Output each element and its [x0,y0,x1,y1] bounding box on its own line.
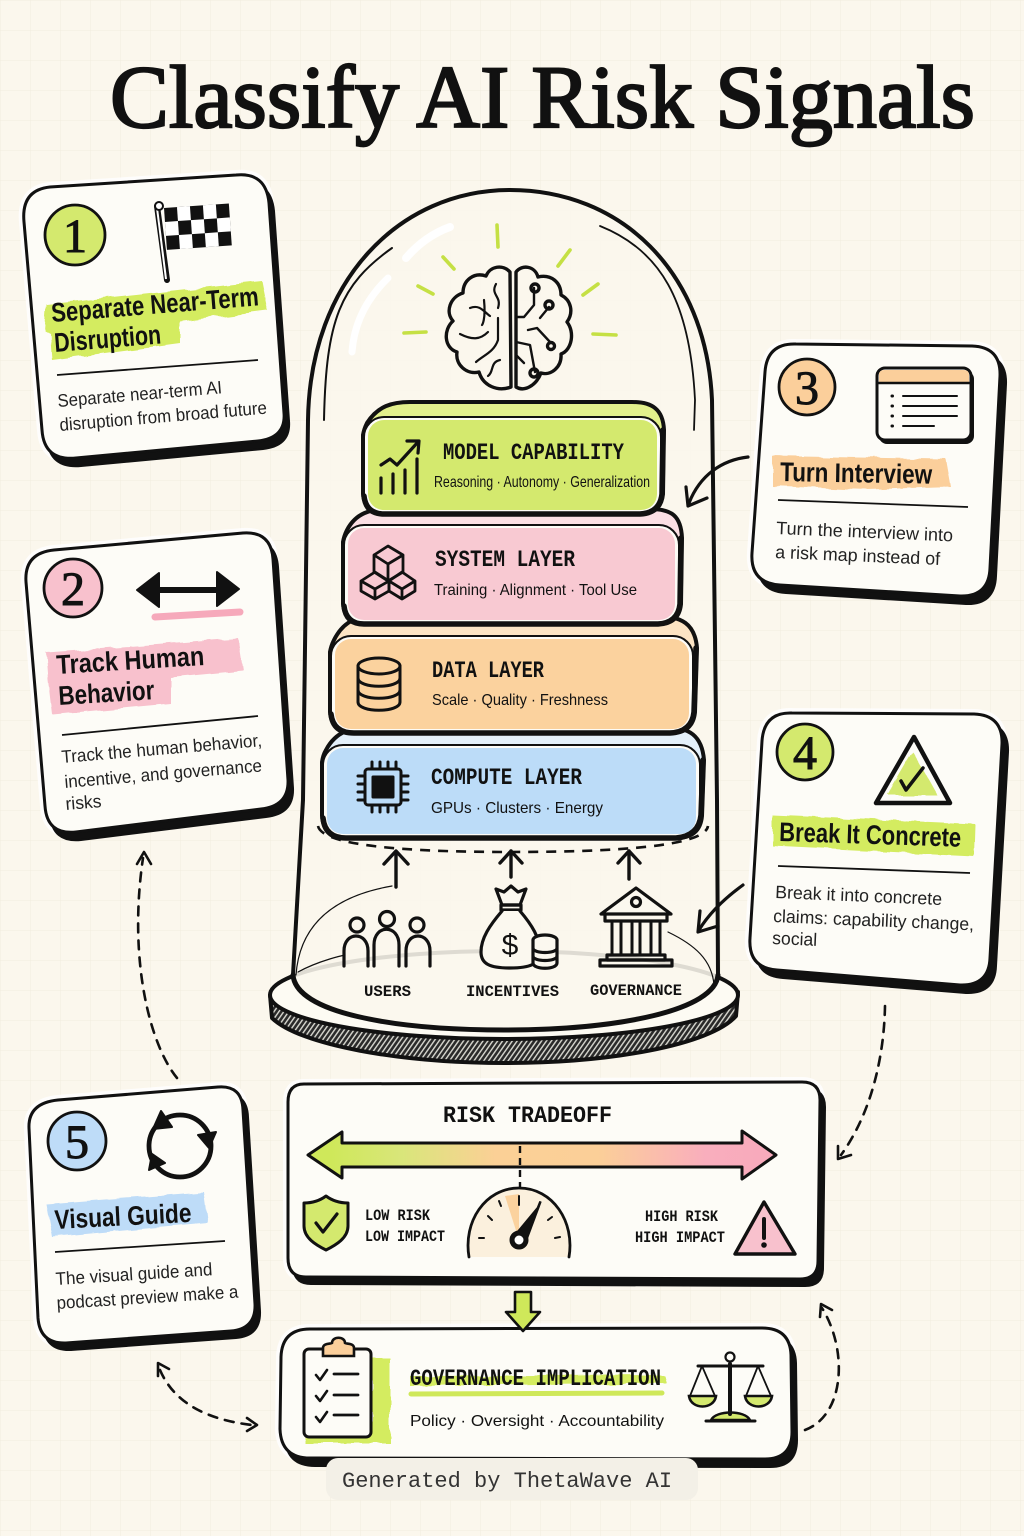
body text: disruption from broad future [59,398,268,435]
footer label [326,1458,698,1500]
low risk label: LOW RISK [365,1207,430,1225]
arrow: card 3 to stack [686,457,748,506]
heading [56,641,205,711]
icon: growth chart [381,441,419,493]
brain rays [404,225,616,335]
body text [772,882,974,950]
number badge 4: 4 [793,727,817,780]
layer stack [322,402,704,838]
system layer [343,509,682,624]
heading: Break It Concrete [779,817,962,853]
icon: clipboard [304,1338,390,1443]
data layer: Scale · Quality · Freshness [432,692,608,709]
body text: Break it into concrete [775,882,943,909]
display base [270,951,738,1063]
brain outline [446,267,572,389]
arrow: card 4 to base [698,885,743,932]
icon: money bag [481,886,557,968]
arrow: card 5 to card 2 [137,852,177,1078]
incentives label: INCENTIVES [466,983,559,1001]
risk tradeoff panel [288,1082,825,1286]
dome glass [293,190,718,1030]
heading: Disruption [53,319,162,358]
governance subtext: Policy · Oversight · Accountability [410,1413,664,1430]
model text: MODEL CAPABILITY [443,440,624,466]
card 2 [26,533,293,840]
body text [55,1259,240,1313]
high risk label: HIGH RISK [645,1208,718,1226]
compute layer [322,727,704,838]
footer label: Generated by ThetaWave AI [342,1469,672,1494]
heading highlight [44,281,268,360]
number badge 3: 3 [795,362,819,415]
icon: chip [358,762,408,812]
heading [50,281,260,358]
low risk label [365,1207,445,1246]
heading highlight [772,815,975,856]
number badge 5: 5 [65,1116,89,1169]
card 5 [29,1087,260,1350]
high risk label [635,1208,725,1247]
icon: cubes [361,546,415,599]
model capability layer: Reasoning · Autonomy · Generalization [434,474,650,491]
arrow: card 4 to risk panel [838,1006,885,1159]
icon: double arrow [137,572,240,617]
icon: scales [689,1352,772,1421]
heading highlight [46,638,243,714]
icon: refresh [149,1111,216,1177]
system text: SYSTEM LAYER [435,547,575,573]
body text: Track the human behavior, [61,730,263,767]
governance implication panel [280,1328,797,1467]
body text: a risk map instead of [775,542,942,569]
number badge 2: 2 [61,563,85,616]
body text: risks [65,791,102,814]
number badge 2 [44,559,102,617]
icon: brain with rays [404,225,616,389]
model capability layer [363,402,664,514]
icon: money bag: $ [502,929,519,962]
inputs below the stack [344,851,682,1001]
number badge 3 [779,359,835,415]
body text: claims: capability change, [773,906,974,934]
users label: USERS [364,983,411,1001]
icon: government building [600,888,672,966]
heading: Turn Interview [780,457,933,490]
governance heading: GOVERNANCE IMPLICATION [410,1366,661,1392]
data text: DATA LAYER [432,658,544,684]
card 3 [752,344,1006,604]
title: Classify AI Risk Signals [110,49,975,147]
heading highlight [410,1375,666,1394]
body text [775,518,954,569]
body text: social [772,928,818,950]
data layer [330,616,697,733]
arrow: card 5 to governance [158,1363,257,1431]
tradeoff double arrow [308,1131,776,1190]
compute layer: GPUs · Clusters · Energy [431,800,603,817]
icon: checkered flag [155,202,232,280]
arrow: governance to risk panel [805,1304,839,1430]
icon: document window [877,368,974,444]
heading: Visual Guide [54,1198,192,1235]
low risk label: LOW IMPACT [365,1228,445,1246]
body text [61,730,263,814]
compute text: COMPUTE LAYER [431,765,582,791]
gauge [468,1188,570,1257]
heading: Behavior [58,675,156,711]
glass dome display [270,190,738,1063]
panel title: RISK TRADEOFF [443,1103,612,1129]
governance label: GOVERNANCE [590,982,682,1000]
number badge 4 [777,724,833,780]
body text: incentive, and governance [64,755,263,792]
body text: The visual guide and [55,1259,213,1289]
card 1 [24,175,289,466]
heading highlight [772,456,951,490]
icon: users [344,912,430,966]
body text: Separate near-term AI [57,377,223,411]
icon: database [358,658,400,710]
card 4 [750,713,1008,993]
body text: Turn the interview into [776,518,954,545]
icon: warning triangle [735,1202,795,1254]
icon: warning triangle with check [876,737,950,803]
body text: podcast preview make a [56,1282,240,1313]
heading: Separate Near-Term [50,281,260,328]
icon: shield [304,1196,348,1250]
number badge 1 [45,205,105,265]
heading highlight [46,1192,208,1237]
body text [57,377,268,435]
arrow: tradeoff to governance [506,1292,540,1331]
heading: Track Human [56,641,205,680]
input arrows [384,851,640,887]
number badge 1: 1 [63,210,87,263]
number badge 5 [48,1112,106,1170]
high risk label: HIGH IMPACT [635,1229,725,1247]
system layer: Training · Alignment · Tool Use [434,582,637,599]
